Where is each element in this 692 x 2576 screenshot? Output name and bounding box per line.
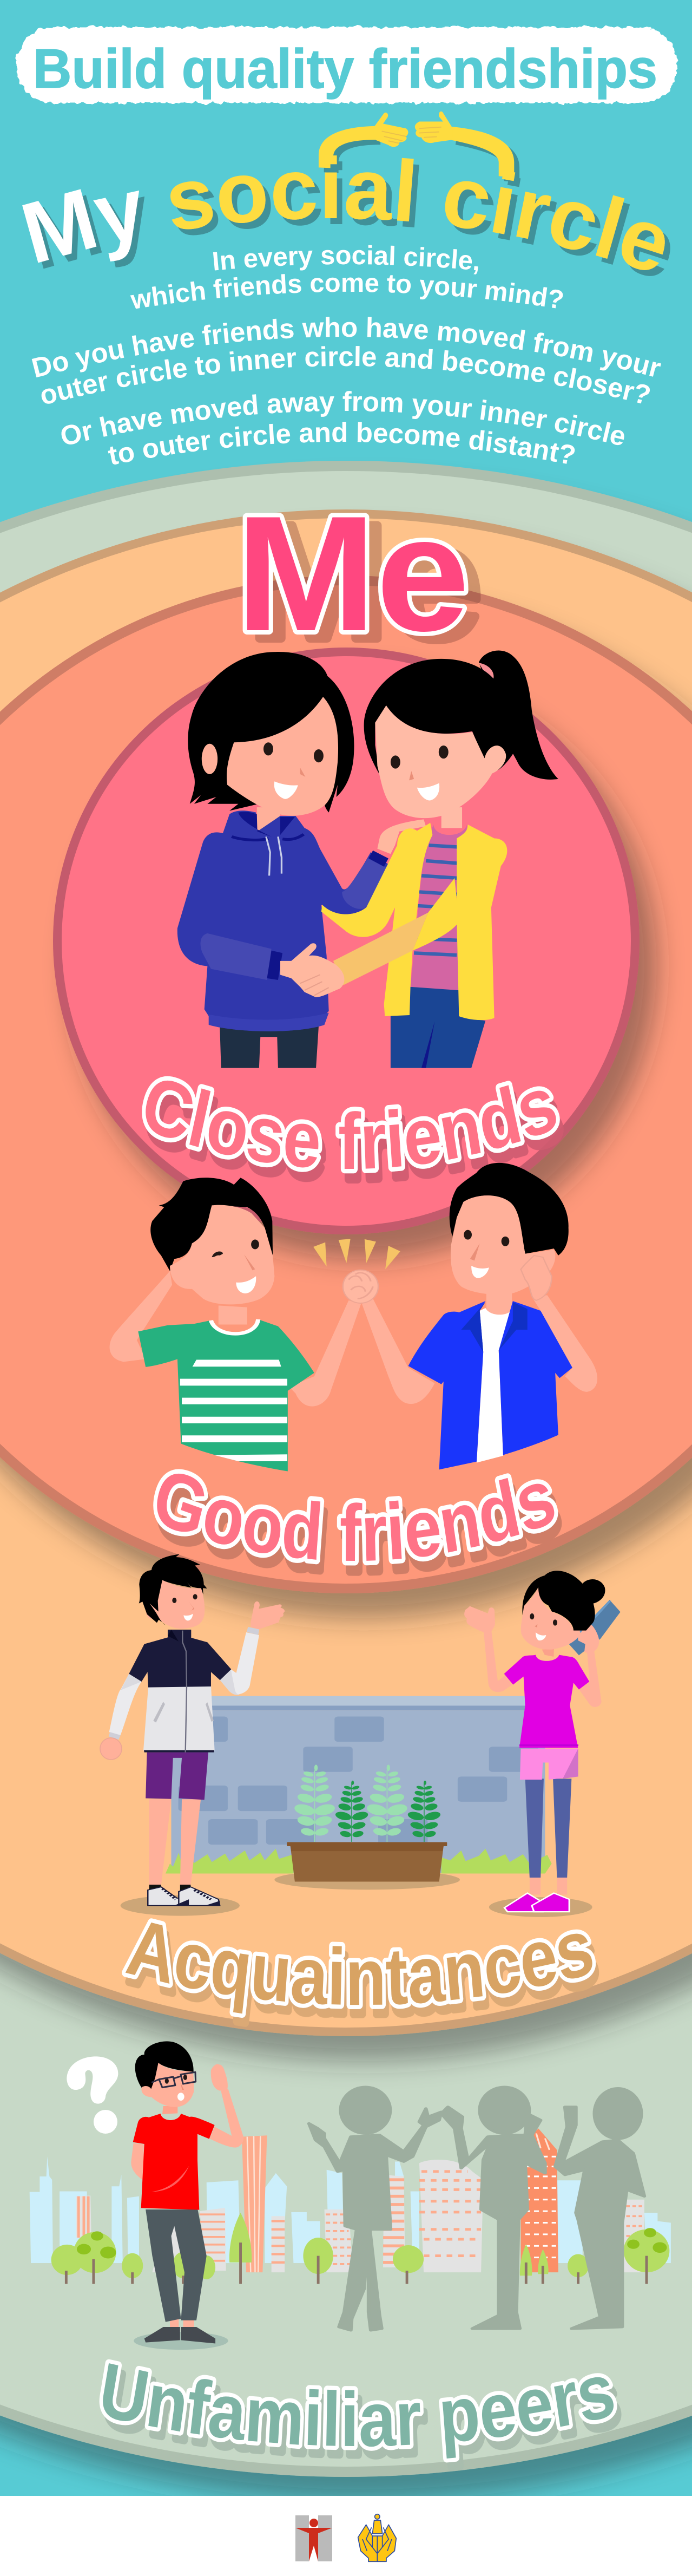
- acquaintance: boy legs: [121, 1753, 240, 1916]
- title: Build quality friendships: [33, 38, 657, 100]
- planter shadow: [274, 1870, 460, 1889]
- planter: [287, 1842, 447, 1881]
- acquaintance: girl: [464, 1571, 621, 1748]
- trees: [51, 2213, 669, 2284]
- right friend: [362, 1163, 597, 1469]
- icon: clasped fist: [343, 1270, 378, 1303]
- title badge: [16, 27, 677, 103]
- coral and grey towers: [76, 2128, 644, 2272]
- unfamiliar boy: [131, 2041, 243, 2210]
- silhouettes: unfamiliar peers: [309, 2087, 644, 2330]
- illustration: two close friends: [177, 650, 558, 1068]
- grass: [166, 1849, 552, 1874]
- heading: My social circle: [22, 155, 670, 276]
- intro text: [31, 245, 661, 465]
- label: Acquaintances: Acquaintances: [122, 1918, 599, 2027]
- label: Unfamiliar peers: Unfamiliar peers: [100, 2359, 621, 2471]
- left friend: [110, 1178, 361, 1472]
- blue buildings: [30, 2156, 671, 2263]
- city skyline: [30, 2128, 671, 2284]
- logo: yellow hands: [358, 2514, 396, 2561]
- plants: [292, 1765, 443, 1842]
- intro text: Or have moved away from your inner circle: [62, 391, 624, 445]
- footer band: [0, 2496, 692, 2576]
- acquaintance: boy: [100, 1554, 285, 1760]
- logo: red figure: [295, 2515, 332, 2561]
- intro text: Do you have friends who have moved from your: [31, 317, 661, 378]
- illustration: wall and planter: [166, 1696, 552, 1889]
- illustration: two good friends: [110, 1163, 597, 1472]
- handshake: [280, 943, 344, 997]
- label: Close friends: Close friends: [142, 1076, 564, 1184]
- intro text: to outer circle and become distant?: [108, 422, 575, 465]
- circle: unfamiliar peers: [0, 461, 692, 2477]
- left friend: [177, 652, 388, 1068]
- right friend: [321, 650, 558, 1068]
- hands arch above heading: [319, 112, 519, 182]
- wall: [171, 1696, 545, 1873]
- unfamiliar boy legs: [134, 2209, 228, 2350]
- intro text: In every social circle,: [213, 245, 478, 274]
- label: Good friends: Good friends: [153, 1469, 562, 1576]
- circle: close friends: [53, 648, 640, 1234]
- intro text: which friends come to your mind?: [130, 274, 563, 309]
- acquaintance: girl legs: [489, 1749, 592, 1917]
- intro text: outer circle to inner circle and become closer?: [41, 346, 650, 404]
- heading: My social circle: My: [22, 189, 145, 269]
- label: Me: Me: [236, 482, 470, 665]
- heading: My social circle: social circle: [170, 155, 670, 276]
- icon: sparks: [313, 1239, 400, 1269]
- circle: good friends: [0, 576, 692, 1593]
- icon: question mark: [67, 2056, 118, 2134]
- circle: acquaintances: [0, 509, 692, 2036]
